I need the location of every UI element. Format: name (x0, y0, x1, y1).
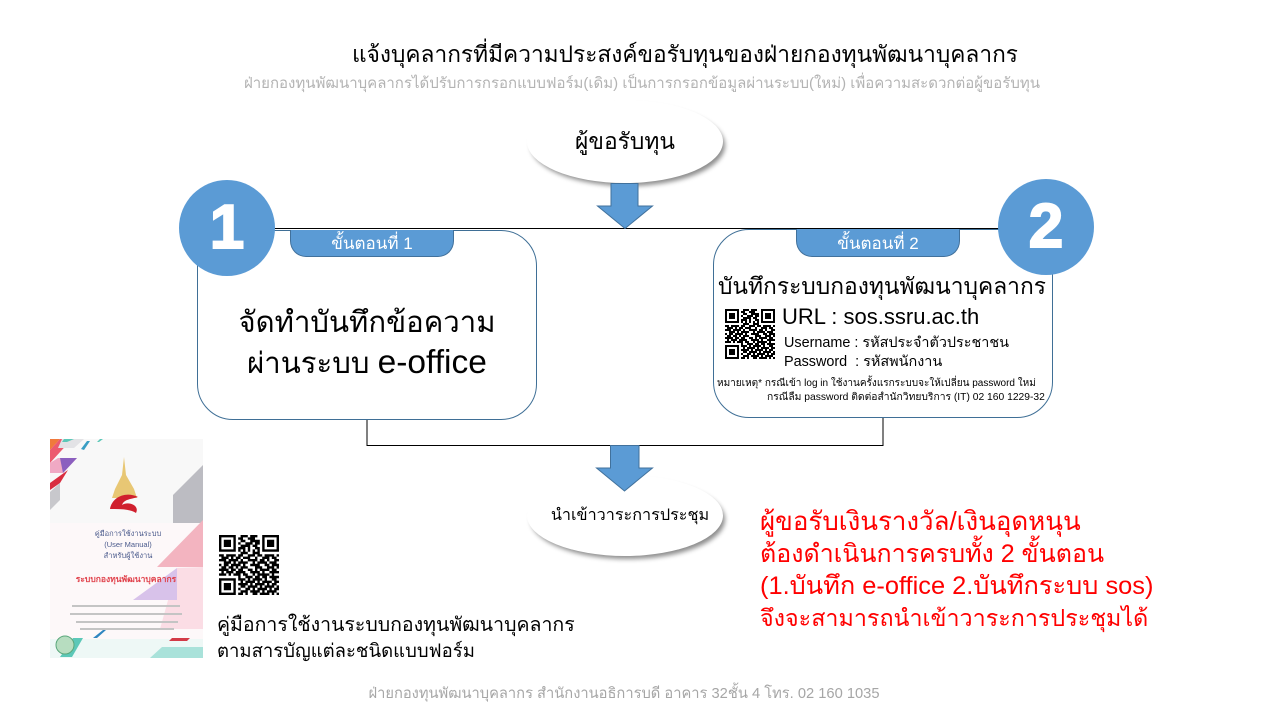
cover system name: ระบบกองทุนพัฒนาบุคลากร (76, 574, 177, 585)
tab: step 1: ขั้นตอนที่ 1 (331, 234, 413, 253)
subtitle: ฝ่ายกองทุนพัฒนาบุคลากรได้ปรับการกรอกแบบฟอร์ม(เดิม) เป็นการกรอกข้อมูลผ่านระบบ(ใหม่) เพื่อความสะดวกต่อผู้ขอรับทุน (244, 75, 1040, 92)
step 2 note (717, 376, 1045, 403)
QR code: system (725, 309, 775, 359)
step 2 heading: บันทึกระบบกองทุนพัฒนาบุคลากร (718, 273, 1046, 299)
panel: step 1 (197, 230, 537, 420)
cover title: คู่มือการใช้งานระบบ (95, 529, 162, 538)
manual caption (217, 614, 575, 662)
step 1 main text: ผ่านระบบ e-office (247, 344, 487, 380)
emblem: crown (112, 457, 137, 498)
badge: number 1: 1 (210, 193, 244, 262)
tab: step 1 (290, 230, 454, 257)
step 2 note: หมายเหตุ* กรณีเข้า log in ใช้งานครั้งแรกระบบจะให้เปลี่ยน password ใหม่ (717, 378, 1036, 389)
ellipse: applicant (527, 100, 723, 183)
badge: number 1 (179, 180, 275, 276)
title: แจ้งบุคลากรที่มีความประสงค์ขอรับทุนของฝ่ายกองทุนพัฒนาบุคลากร (352, 41, 1018, 67)
cover subtitle: (User Manual) (104, 540, 152, 549)
red callout: (1.บันทึก e-office 2.บันทึกระบบ sos) (760, 572, 1153, 600)
footer: ฝ่ายกองทุนพัฒนาบุคลากร สำนักงานอธิการบดี อาคาร 32ชั้น 4 โทร. 02 160 1035 (368, 686, 880, 702)
step 2 password: Password : รหัสพนักงาน (784, 354, 942, 370)
step 2 note: กรณีลืม password ติดต่อสำนักวิทยบริการ (IT) 02 160 1229-32 (767, 392, 1045, 403)
ellipse: applicant: ผู้ขอรับทุน (575, 128, 675, 154)
manual caption: คู่มือการใช้งานระบบกองทุนพัฒนาบุคลากร (217, 614, 575, 636)
tab: step 2: ขั้นตอนที่ 2 (837, 234, 919, 253)
badge: number 2 (998, 179, 1094, 275)
red callout: จึงจะสามารถนำเข้าวาระการประชุมได้ (760, 605, 1148, 631)
step 2 url: URL : sos.ssru.ac.th (782, 304, 979, 329)
badge: number 2: 2 (1029, 192, 1063, 261)
emblem: red glyph (110, 495, 138, 513)
cover audience: สำหรับผู้ใช้งาน (104, 551, 152, 560)
step 1 main text: จัดทำบันทึกข้อความ (238, 306, 496, 339)
QR code: manual (219, 535, 279, 595)
manual cover (50, 439, 203, 658)
arrow: steps to meeting (595, 445, 654, 492)
step 2 username: Username : รหัสประจำตัวประชาชน (784, 335, 1009, 351)
ellipse: meeting agenda (527, 475, 723, 556)
manual caption: ตามสารบัญแต่ละชนิดแบบฟอร์ม (217, 640, 475, 661)
tab: step 2 (796, 229, 960, 257)
panel: step 2 (713, 229, 1053, 418)
red callout: ต้องดำเนินการครบทั้ง 2 ขั้นตอน (760, 540, 1104, 568)
red callout (760, 508, 1153, 632)
arrow: applicant to steps (596, 183, 654, 229)
ellipse: meeting agenda: นำเข้าวาระการประชุม (551, 506, 709, 524)
red callout: ผู้ขอรับเงินรางวัล/เงินอุดหนุน (760, 508, 1081, 536)
step 1 main text (238, 306, 496, 380)
